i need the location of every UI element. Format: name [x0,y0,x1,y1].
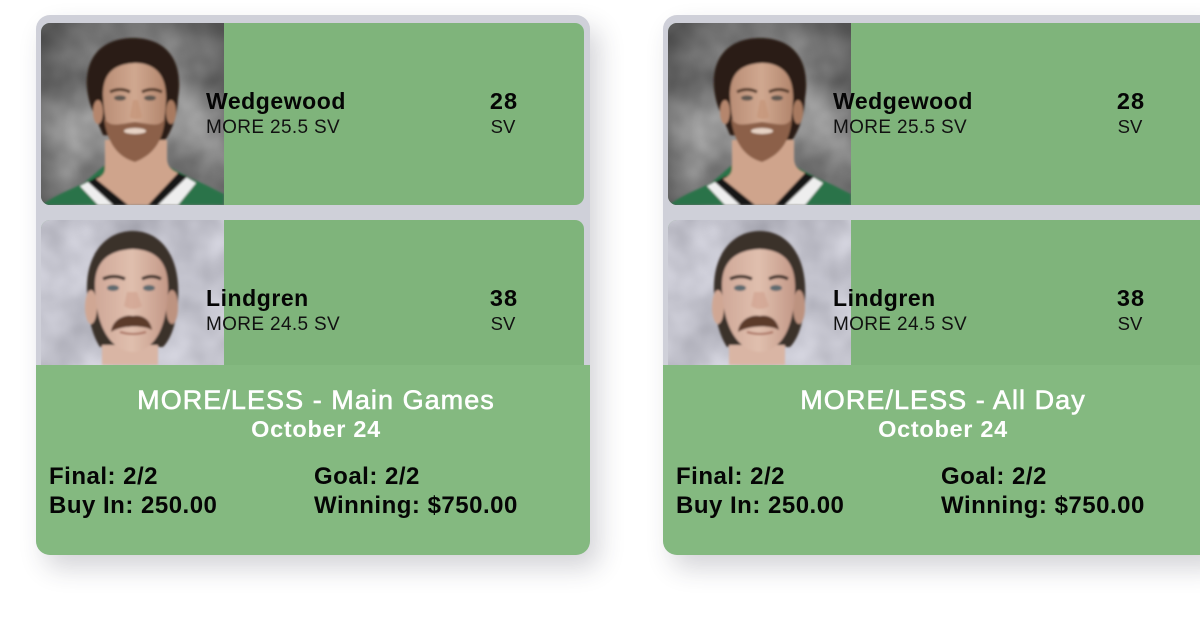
stat unit: SV [491,116,515,137]
stat: final: Final: 2/2 [49,463,158,490]
contest title: MORE/LESS - All Day [800,385,1086,415]
stat unit: SV [1118,116,1142,137]
pick line: MORE 24.5 SV [833,314,967,335]
stat: goal: Goal: 2/2 [314,463,420,490]
player row: Wedgewood [668,23,1200,205]
stat value: 28 [490,88,518,114]
stat unit: SV [1118,313,1142,334]
player name: Wedgewood [206,88,346,114]
player row: Wedgewood [41,23,584,205]
pick line: MORE 25.5 SV [833,117,967,138]
contest title: MORE/LESS - Main Games [137,385,495,415]
photo: Wedgewood portrait [41,23,224,205]
stat: winning: Winning: $750.00 [314,492,518,519]
pick line: MORE 25.5 SV [206,117,340,138]
panel: Main Games entry card [36,15,590,555]
stat: buy in: Buy In: 250.00 [676,492,844,519]
stat: goal: Goal: 2/2 [941,463,1047,490]
stat value: 38 [490,285,518,311]
footer: contest summary [663,365,1200,555]
contest date: October 24 [878,416,1008,442]
stat: winning: Winning: $750.00 [941,492,1145,519]
stat unit: SV [491,313,515,334]
stat value: 38 [1117,285,1145,311]
stat: buy in: Buy In: 250.00 [49,492,217,519]
player name: Wedgewood [833,88,973,114]
player row: Lindgren [668,220,1200,365]
contest date: October 24 [251,416,381,442]
panel: All Day entry card [663,15,1200,555]
pick line: MORE 24.5 SV [206,314,340,335]
stat value: 28 [1117,88,1145,114]
stat: final: Final: 2/2 [676,463,785,490]
player name: Lindgren [206,285,309,311]
photo: Lindgren portrait [41,220,224,365]
footer: contest summary [36,365,590,555]
player row: Lindgren [41,220,584,365]
player name: Lindgren [833,285,936,311]
photo: Lindgren portrait [668,220,851,365]
photo: Wedgewood portrait [668,23,851,205]
